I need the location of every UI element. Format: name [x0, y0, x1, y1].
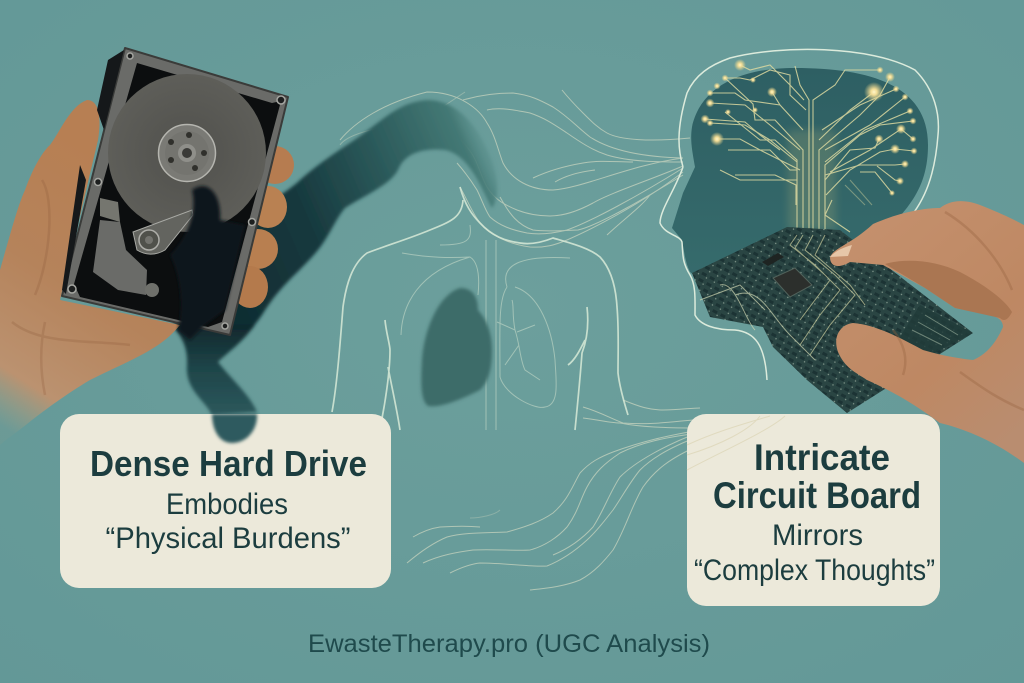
left hand: [0, 100, 294, 445]
faint lines over card: [687, 416, 785, 470]
smoke tail over card: [212, 414, 257, 443]
hard drive: [62, 48, 288, 340]
left card heading: Dense Hard Drive: [90, 443, 367, 484]
circuit glow nodes: [700, 59, 918, 196]
torso left outline: [332, 200, 463, 412]
right card line 2: “Complex Thoughts”: [694, 554, 935, 587]
right card: Circuit Board: [713, 475, 921, 516]
dark smoke plume: [172, 100, 497, 415]
spindle hub: [158, 124, 216, 182]
smoke tail: [172, 325, 257, 415]
left card line 1: Embodies: [166, 488, 288, 521]
arm line left: [380, 320, 400, 430]
casing: [62, 48, 288, 335]
smoke over drive: [170, 186, 245, 340]
dark lung: [421, 288, 492, 406]
right card line 1: Mirrors: [772, 519, 863, 552]
footer source label: EwasteTherapy.pro (UGC Analysis): [308, 630, 710, 658]
torso outline with lungs: [332, 187, 628, 430]
left card line 2: “Physical Burdens”: [106, 522, 350, 555]
shaded fingers behind: [885, 261, 1012, 320]
actuator arm: [133, 210, 193, 254]
circuit tree traces: [705, 65, 914, 235]
torso right outline: [460, 187, 628, 415]
head white outline: [660, 49, 938, 380]
corner screws: [68, 53, 285, 329]
chip: [773, 268, 812, 297]
magnet assembly: [93, 220, 147, 295]
flowing thin lines: [340, 90, 700, 590]
left card: [60, 414, 391, 588]
platter: [108, 74, 266, 232]
fingers: [256, 146, 294, 184]
right hand: [830, 201, 1024, 463]
right card heading: Intricate: [754, 437, 890, 478]
circuit board: [692, 227, 973, 413]
arm line right: [568, 307, 588, 430]
lines below the body: [623, 400, 700, 410]
right card: [687, 414, 940, 606]
trunk glow: [788, 130, 836, 230]
palm and thumb: [0, 100, 180, 445]
brain head silhouette: [660, 49, 938, 380]
interior: [74, 63, 281, 327]
